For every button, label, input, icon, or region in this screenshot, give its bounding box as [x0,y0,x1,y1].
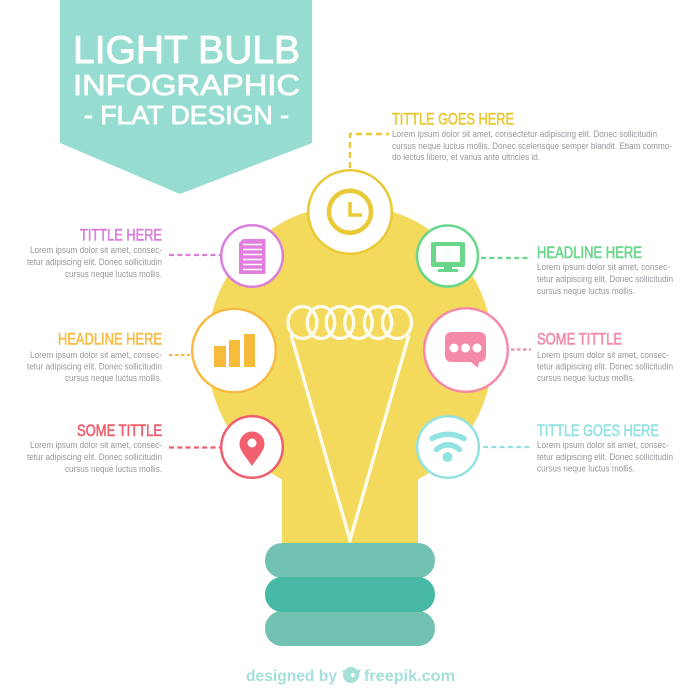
text block [537,350,673,384]
title banner [60,0,312,194]
text block: cursus neque luctus mollis. [65,464,162,475]
filament [288,306,412,540]
text block: Lorem ipsum dolor sit amet, consec- [30,245,162,256]
heading: headline here: HEADLINE HERE [537,244,642,262]
text block: Lorem ipsum dolor sit amet, consec- [537,440,669,451]
title text: - FLAT DESIGN - [84,100,289,130]
text block: cursus neque luctus mollis. [65,269,162,280]
heading: tittle goes here: TITTLE GOES HERE [537,422,659,440]
text block: Lorem ipsum dolor sit amet, consec- [537,350,669,361]
heading: some tittle: SOME TITTLE [537,330,622,348]
text block: tetur adipiscing elit. Donec sollicitudin [27,362,162,372]
icon: location pin [240,432,264,466]
item: clock, top [308,110,672,254]
text block [27,245,162,280]
heading: headline here: HEADLINE HERE [58,330,162,348]
footer credit: freepik.com [364,668,455,685]
item: document [27,225,283,287]
text block: tetur adipiscing elit. Donec sollicitudin [27,452,162,463]
text block [392,129,672,163]
title text [73,29,300,130]
text block: tetur adipiscing elit. Donec sollicitudin [537,452,673,463]
item: bar chart [27,309,276,392]
item: monitor [417,226,673,297]
text block: tetur adipiscing elit. Donec sollicitudin [537,362,673,372]
text block: cursus neque luctus mollis. [537,464,635,474]
text block: tetur adipiscing elit. Donec sollicitudin [27,257,162,268]
item: chat bubble [424,308,673,392]
text block: cursus neque luctus mollis. [65,373,162,384]
icon: chat bubble [445,332,486,368]
text block: Lorem ipsum dolor sit amet, consec- [537,262,670,273]
text block [537,262,673,297]
text block [537,440,673,474]
text block: Lorem ipsum dolor sit amet, consec- [30,350,162,361]
footer credit [246,666,455,685]
icon: freepik bird [342,666,361,683]
text block [27,440,162,475]
icon: bar chart [214,334,255,367]
text block: Lorem ipsum dolor sit amet, consec- [30,440,162,451]
text block [27,350,162,384]
text block: tetur adipiscing elit. Donec sollicitudin [537,274,673,285]
heading: some tittle: SOME TITTLE [77,422,162,440]
text block: Lorem ipsum dolor sit amet, consectetur adipiscing elit. Donec sollicitudin [392,129,657,140]
icon: monitor [431,242,465,272]
heading: tittle here: TITTLE HERE [80,226,162,244]
text block: cursus neque luctus mollis. [537,373,635,384]
light bulb glass [207,205,493,543]
text block: cursus neque luctus mollis. [537,286,635,297]
title text: LIGHT BULB [73,29,300,72]
icon: wifi [432,434,464,462]
text block: do lectus libero, et varius ante ultricies id. [392,152,540,163]
icon: document [239,239,266,274]
item: location pin [27,416,283,478]
item: wifi [417,416,673,478]
bulb base [265,543,435,646]
title text: INFOGRAPHIC [73,70,300,102]
heading: tittle goes here: TITTLE GOES HERE [392,110,514,128]
footer credit: designed by [246,668,337,685]
icon: clock [329,191,371,233]
